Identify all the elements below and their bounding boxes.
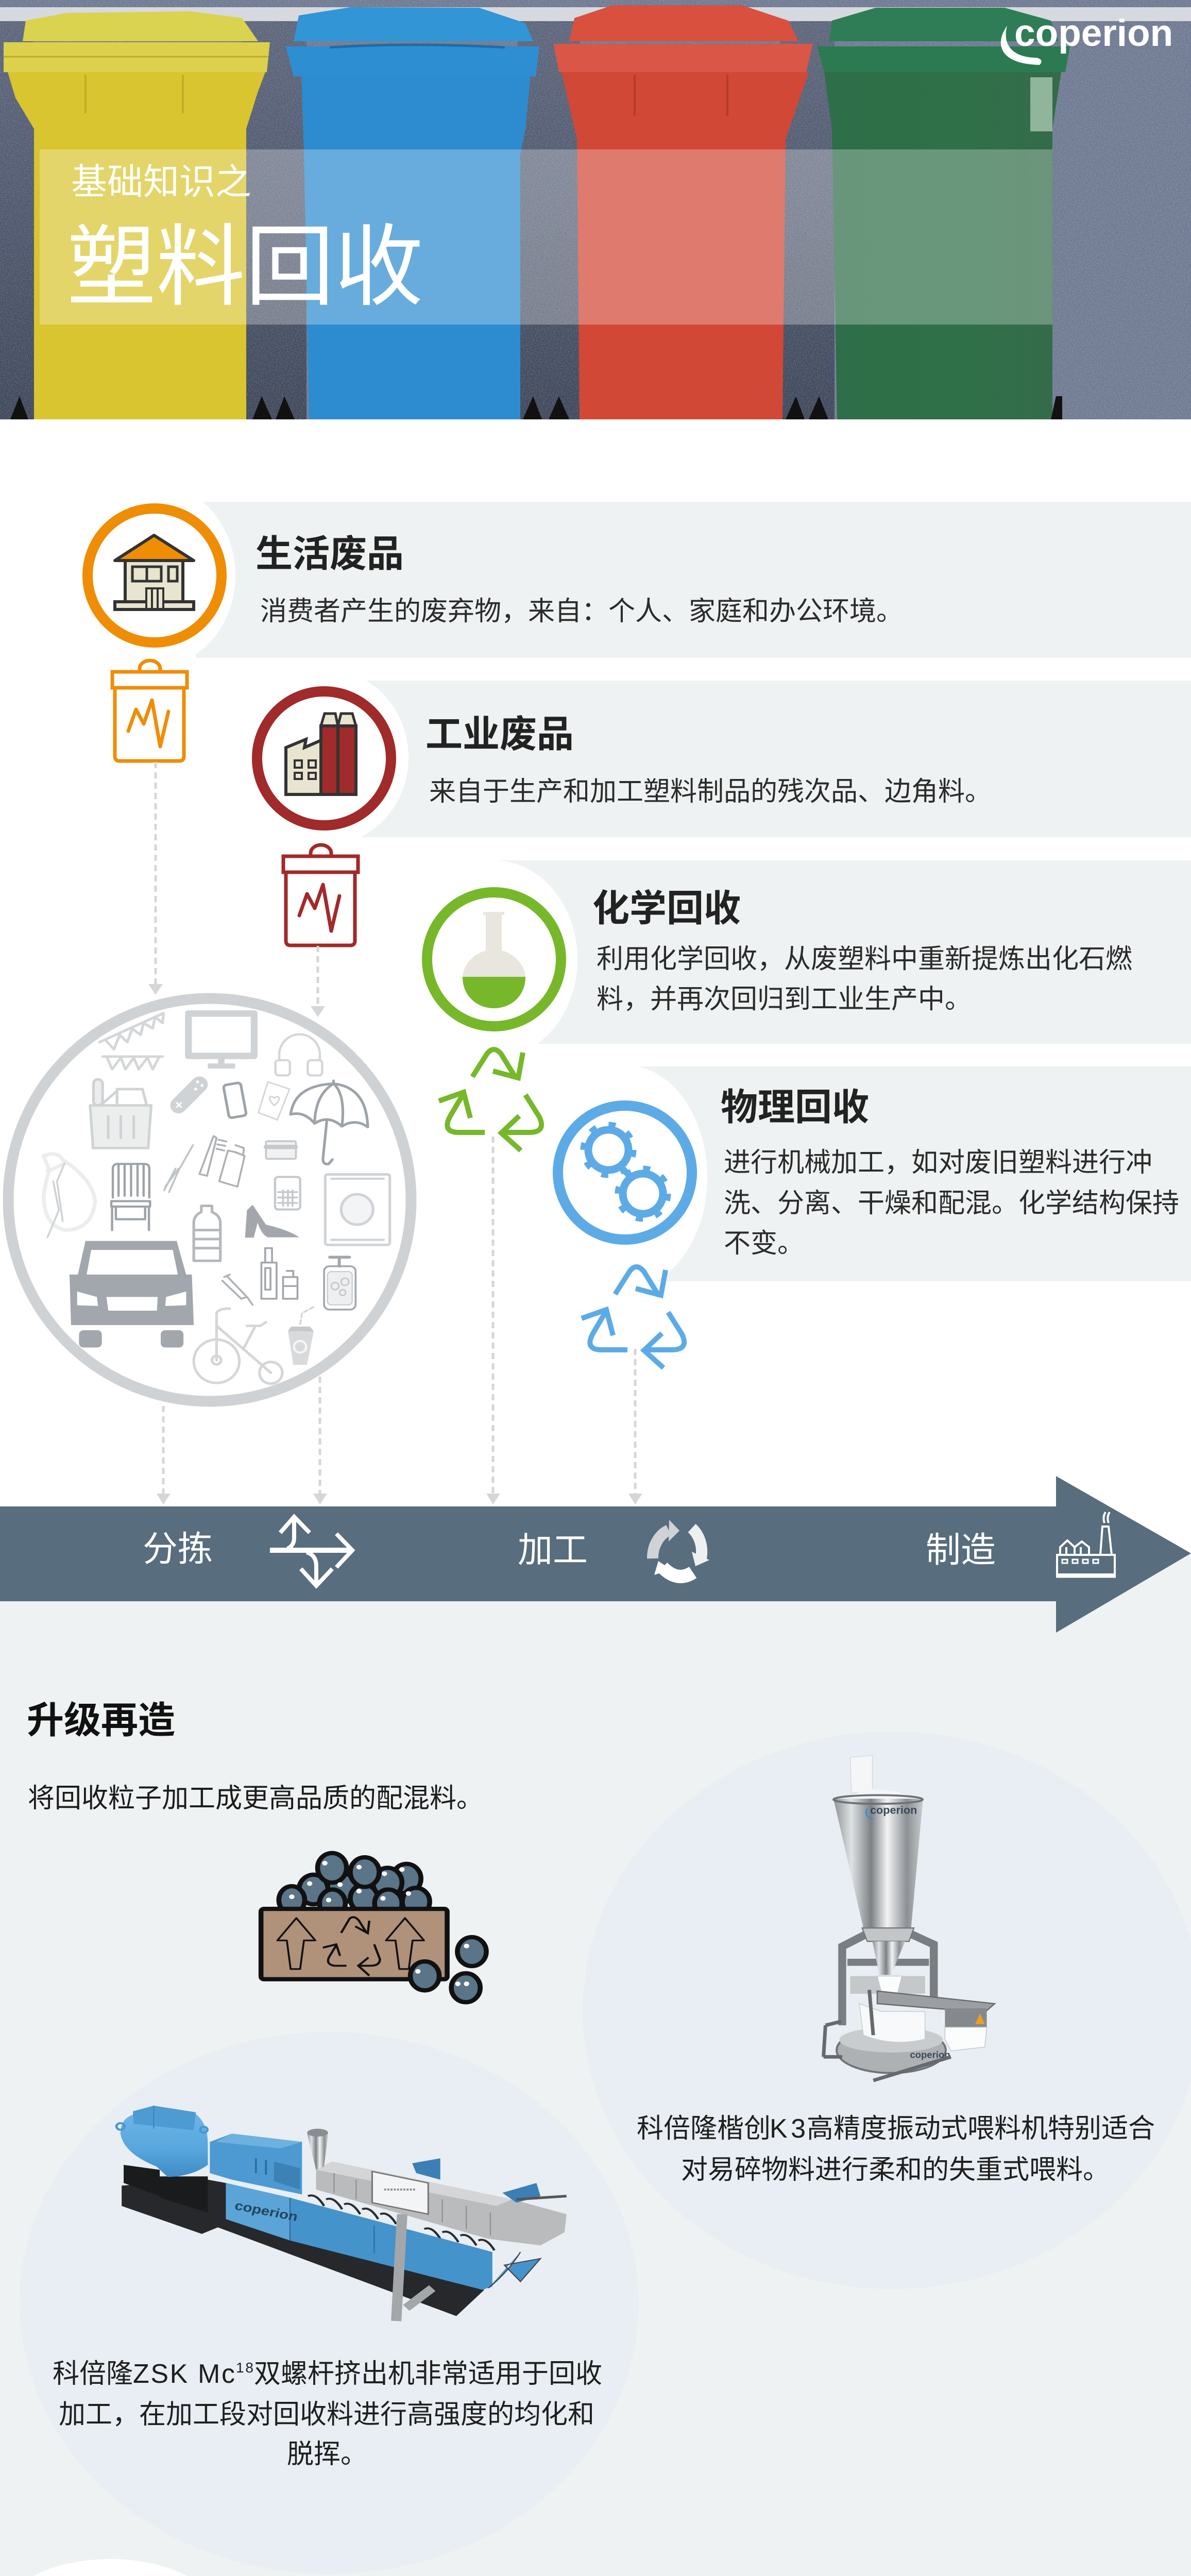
heading: industrial waste: 工业废品 — [426, 714, 574, 755]
heading: upcycling: 升级再造 — [27, 1700, 175, 1741]
icon: gears in blue ring — [558, 1106, 692, 1240]
text: ZSK extruder: 双螺杆挤出机非常适用于回收 — [254, 2359, 602, 2389]
panel: K3 feeder — [583, 1732, 1191, 2289]
text: ZSK extruder: 脱挥。 — [287, 2439, 367, 2469]
header photo: recycling bins — [0, 0, 1191, 419]
image: twin-screw extruder: coperion — [233, 2198, 299, 2224]
icon: blue recycling arrows — [582, 1267, 684, 1368]
logo: coperion header: coperion — [1014, 12, 1173, 54]
text: K3 feeder: 对易碎物料进行柔和的失重式喂料。 — [681, 2155, 1110, 2185]
panel: chemical recycling — [411, 860, 1191, 1058]
arrow: chemical recycling to processing — [486, 1137, 500, 1504]
icon: yellow bin — [4, 11, 270, 419]
text: chemical recycling: 利用化学回收，从废塑料中重新提炼出化石燃 — [597, 944, 1132, 974]
arrow: waste circle to sorting left — [157, 1406, 171, 1504]
text: K3 feeder: 科倍隆楷创 — [637, 2114, 771, 2144]
image: twin-screw extruder — [116, 2106, 567, 2321]
text: household waste: 消费者产生的废弃物，来自：个人、家庭和办公环境。 — [260, 597, 903, 626]
text: K3 feeder: 高精度振动式喂料机特别适合 — [807, 2114, 1155, 2144]
text: chemical recycling: 料，并再次回归到工业生产中。 — [597, 985, 972, 1014]
title: 塑料回收 — [67, 217, 423, 317]
process arrow band — [0, 1476, 1191, 1633]
image: vibratory feeder: coperion — [870, 1804, 917, 1816]
text: ZSK extruder: 科倍隆 — [53, 2359, 133, 2389]
icon: factory — [1056, 1512, 1116, 1577]
arrow: mechanical recycling to processing — [628, 1349, 642, 1504]
icon: orange bin — [112, 660, 187, 761]
label: manufacturing: 制造 — [926, 1531, 996, 1570]
subtitle: 基础知识之 — [71, 162, 251, 202]
text: mechanical recycling: 进行机械加工，如对废旧塑料进行冲 — [724, 1148, 1152, 1178]
arrow: household to waste circle — [148, 762, 163, 995]
icon: green recycling arrows — [439, 1049, 541, 1150]
icon: red bin — [553, 5, 813, 419]
label: sorting: 分拣 — [143, 1530, 213, 1569]
icon: flask in green ring — [427, 892, 561, 1026]
image: vibratory feeder — [824, 1755, 995, 2080]
image: vibratory feeder: coperion — [910, 2049, 950, 2060]
text: upcycling: 将回收粒子加工成更高品质的配混料。 — [28, 1784, 483, 1814]
speech bubble — [0, 2559, 222, 2576]
panel: mechanical recycling — [542, 1065, 1191, 1290]
icon: factory in red ring — [257, 691, 391, 825]
text: mechanical recycling: 洗、分离、干燥和配混。化学结构保持 — [724, 1189, 1179, 1218]
icon: green bin — [817, 8, 1070, 419]
icon: sorting arrows — [270, 1517, 352, 1586]
section background: upcycling — [0, 1553, 1191, 2576]
icon: house in orange ring — [88, 509, 222, 642]
waste items circle — [8, 998, 411, 1401]
text: ZSK extruder: 加工，在加工段对回收料进行高强度的均化和 — [59, 2400, 594, 2430]
text: ZSK extruder: ZSK Mc — [133, 2359, 235, 2389]
text: industrial waste: 来自于生产和加工塑料制品的残次品、边角料。 — [429, 777, 992, 807]
arrow: industrial to waste circle — [311, 946, 325, 1017]
panel: ZSK extruder — [20, 2032, 639, 2574]
icon: pellets in box — [261, 1853, 486, 2002]
text: mechanical recycling: 不变。 — [724, 1229, 804, 1259]
icon: processing cycle — [653, 1520, 709, 1577]
panel: household waste — [74, 484, 1191, 667]
heading: household waste: 生活废品 — [256, 534, 404, 575]
translucent title panel — [40, 149, 1052, 325]
panel: industrial waste — [240, 669, 1191, 846]
heading: mechanical recycling: 物理回收 — [721, 1087, 869, 1128]
arrow: waste circle to sorting right — [313, 1377, 327, 1504]
heading: chemical recycling: 化学回收 — [592, 888, 741, 929]
icon: blue bin — [286, 7, 539, 419]
product icons — [44, 1013, 390, 1384]
label: processing: 加工 — [518, 1531, 588, 1570]
icon: red bin — [283, 845, 358, 945]
text: ZSK extruder: 18 — [236, 2360, 253, 2376]
text: K3 feeder: K3 — [770, 2114, 806, 2144]
